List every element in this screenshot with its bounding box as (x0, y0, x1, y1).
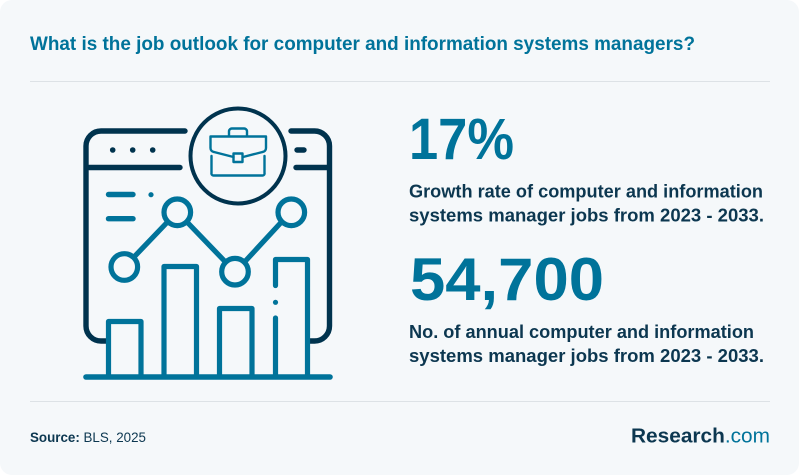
growth description (409, 182, 764, 226)
growth description: systems manager jobs from 2023 - 2033. (409, 206, 764, 226)
stat: 54,700 jobs (409, 246, 764, 366)
jobs description (409, 322, 764, 366)
browser window frame (86, 131, 330, 341)
17% value: 17% (409, 107, 514, 172)
briefcase badge (190, 108, 286, 204)
jobs description: systems manager jobs from 2023 - 2033. (409, 346, 764, 366)
54,700 value: 54,700 (410, 246, 604, 313)
window dots (110, 147, 156, 153)
icon: briefcase (210, 128, 266, 176)
icon: analytics window with briefcase and charts (86, 108, 330, 377)
small accent dots (148, 192, 278, 305)
growth description: Growth rate of computer and information (409, 182, 763, 202)
title: What is the job outlook for computer and information systems managers? (30, 33, 695, 55)
text placeholder lines (108, 194, 133, 219)
jobs description: No. of annual computer and information (409, 322, 754, 342)
logo: Research.com: Research.com (631, 424, 770, 448)
stat: 17% growth (409, 107, 764, 226)
source note: Source: BLS, 2025 (30, 430, 146, 445)
line chart (111, 199, 305, 285)
bar chart (86, 260, 330, 377)
